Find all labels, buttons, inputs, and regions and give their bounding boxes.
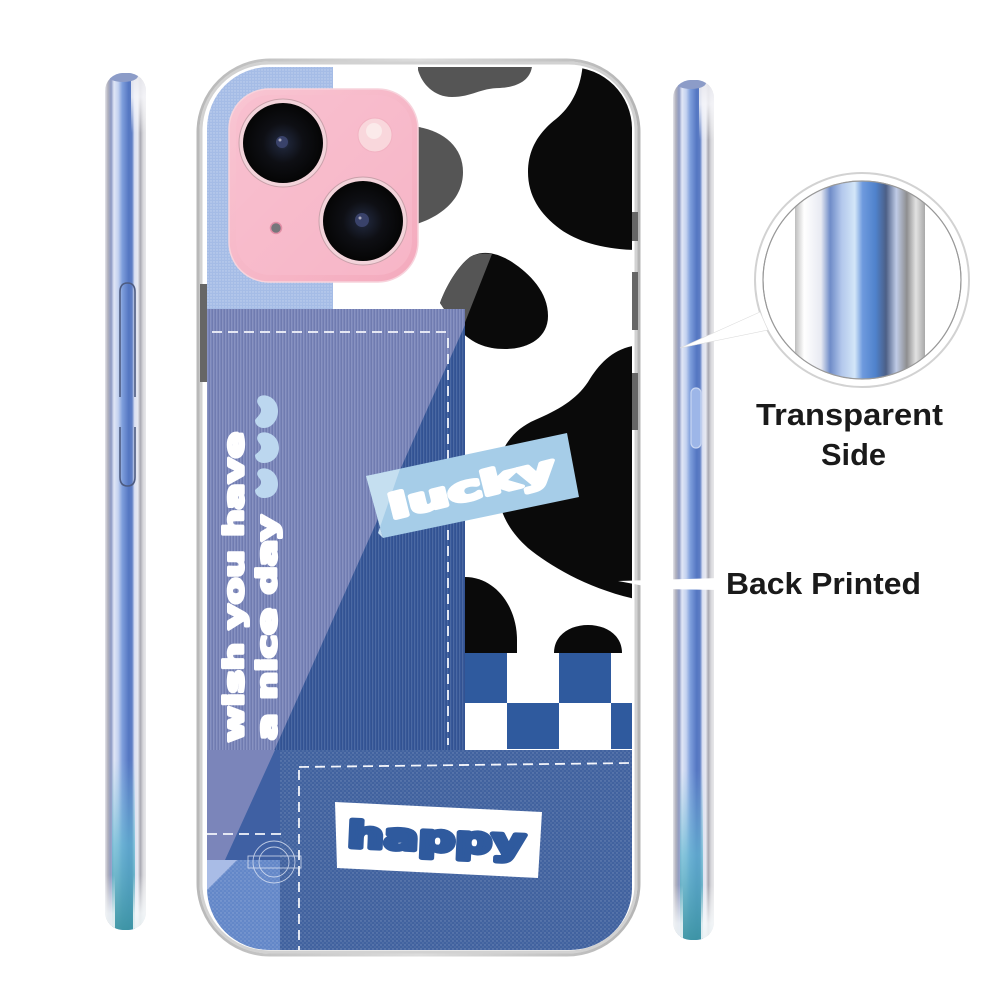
cow spot: small arch [554,625,622,653]
light diagonal reflection over pocket [207,309,465,750]
bottom denim patch [280,750,640,955]
happy tag [335,802,542,878]
lens one [239,99,327,187]
magnifier callout: transparent side [680,170,969,390]
denim pocket [274,325,465,750]
side button shadows [200,212,638,430]
stamp logo [248,841,301,883]
label: transparent side [756,397,943,472]
printed back design [207,60,640,955]
hearts [255,395,279,498]
lower left denim strip [225,750,280,860]
text: wish you have: wish you have [219,432,250,742]
microphone [270,222,282,234]
label: back printed: Back Printed [726,566,921,601]
cow spot: left arch [465,577,517,653]
tag text: lucky: lucky [385,448,559,527]
tag text: happy: happy [347,815,526,864]
label: transparent side: Side [821,437,886,472]
phone case [198,60,640,955]
back printed pointer [618,578,720,590]
callout pointer [680,312,768,348]
cow spot: top right [528,68,632,250]
grey transparent section of middle spot [440,253,492,330]
checkerboard [465,653,632,749]
left side volume buttons [120,283,135,486]
bottom left light patch [207,860,280,955]
left side view of transparent case [105,70,146,930]
case frame [198,60,639,955]
stitching [207,332,632,950]
light denim top left [207,67,333,311]
label: transparent side: Transparent [756,397,943,432]
right side view of transparent case [673,77,714,940]
cow spot: grey behind camera [418,127,463,224]
cow spot: top grey [418,67,532,97]
text: a nice day: a nice day [252,514,283,740]
lucky tag [366,433,579,538]
camera module [229,89,418,282]
magnifier circle [755,173,969,387]
cow spot: middle [440,253,548,349]
cow spot: lower right [502,346,632,598]
right side power button [691,388,701,448]
flash [358,118,392,152]
lens two [319,177,407,265]
